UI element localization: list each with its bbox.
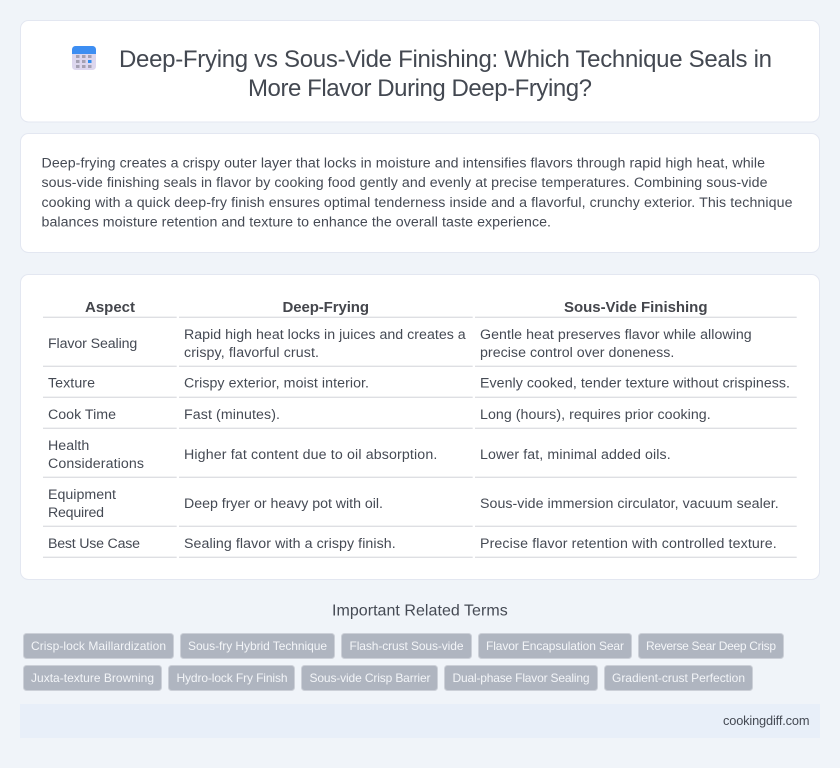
tag: sous-fry hybrid technique: Sous-fry Hybrid Technique: [188, 639, 327, 653]
table header: Sous-Vide Finishing: [564, 299, 708, 316]
text block: intro paragraph: sous-vide finishing seals in flavor by cooking food gently and evenly at precise temperatures. Combining sous-vide: [42, 175, 768, 191]
tag: gradient-crust perfection: [604, 666, 752, 690]
tag: flavor encapsulation sear: [478, 634, 632, 658]
table row: health considerations: Health: [48, 438, 89, 454]
heading: important related terms: Important Related Terms: [332, 603, 508, 620]
text block: intro paragraph: balances moisture retention and texture to enhance the overall taste experience.: [42, 214, 551, 230]
text block: intro paragraph: Deep-frying creates a crispy outer layer that locks in moisture and intensifies flavors through rapid high heat, while: [42, 156, 765, 172]
table row: flavor sealing: Flavor Sealing: [48, 336, 137, 352]
footer bar: cookingdiff.com: [723, 713, 810, 728]
tag: hydro-lock fry finish: [168, 666, 294, 690]
icon: calendar: [72, 46, 96, 70]
table row: flavor sealing: Gentle heat preserves flavor while allowing: [480, 327, 752, 343]
table row: texture: [43, 376, 797, 397]
table row: equipment required: Deep fryer or heavy pot with oil.: [184, 496, 383, 512]
panel: title card: [20, 20, 820, 122]
tag: dual-phase flavor sealing: [444, 666, 598, 690]
footer bar: [20, 704, 820, 738]
table row: health considerations: Higher fat content due to oil absorption.: [184, 447, 437, 463]
table row: best use case: Precise flavor retention with controlled texture.: [480, 536, 777, 552]
table row: health considerations: [43, 438, 797, 477]
tag: sous-vide crisp barrier: Sous-vide Crisp Barrier: [310, 671, 430, 685]
table row: cook time: [43, 407, 797, 428]
table row: best use case: Sealing flavor with a crispy finish.: [184, 536, 396, 552]
table row: texture: Crispy exterior, moist interior.: [184, 376, 369, 392]
table row: flavor sealing: precise control over doneness.: [480, 345, 674, 361]
table row: cook time: Cook Time: [48, 407, 116, 423]
table row: flavor sealing: [43, 327, 797, 366]
tag: juxta-texture browning: [24, 666, 162, 690]
tag: reverse sear deep crisp: Reverse Sear Deep Crisp: [646, 639, 776, 653]
tag: sous-fry hybrid technique: [180, 634, 334, 658]
table row: best use case: [43, 536, 797, 557]
table row: best use case: Best Use Case: [48, 536, 140, 552]
table row: flavor sealing: crispy, flavorful crust.: [184, 345, 319, 361]
tag: juxta-texture browning: Juxta-texture Browning: [31, 671, 154, 685]
tag: dual-phase flavor sealing: Dual-phase Flavor Sealing: [452, 671, 590, 685]
table row: health considerations: Considerations: [48, 456, 144, 472]
table header: Deep-Frying: [282, 299, 369, 316]
panel: comparison table: [20, 274, 820, 580]
tag: flash-crust sous-vide: [342, 634, 472, 658]
table row: equipment required: Required: [48, 505, 104, 521]
tag: flash-crust sous-vide: Flash-crust Sous-vide: [350, 639, 464, 653]
title: Deep-Frying vs Sous-Vide Finishing: Which Technique Seals in: [119, 46, 772, 73]
tag: crisp-lock maillardization: Crisp-lock Maillardization: [31, 639, 166, 653]
tag: flavor encapsulation sear: Flavor Encapsulation Sear: [486, 639, 624, 653]
table header: [43, 299, 797, 317]
table row: cook time: Long (hours), requires prior cooking.: [480, 407, 711, 423]
table row: equipment required: Sous-vide immersion circulator, vacuum sealer.: [480, 496, 779, 512]
tag: reverse sear deep crisp: [638, 634, 784, 658]
panel: related term tags: [24, 634, 784, 690]
tag: sous-vide crisp barrier: [302, 666, 438, 690]
table row: health considerations: Lower fat, minimal added oils.: [480, 447, 671, 463]
tag: crisp-lock maillardization: [24, 634, 174, 658]
tag: hydro-lock fry finish: Hydro-lock Fry Finish: [176, 671, 288, 685]
table row: flavor sealing: Rapid high heat locks in juices and creates a: [184, 327, 466, 343]
panel: introduction text: [20, 134, 820, 252]
table row: cook time: Fast (minutes).: [184, 407, 280, 423]
text block: intro paragraph: cooking with a quick deep-fry finish ensures optimal tenderness inside and a flavorful, crunchy exterior. This technique: [42, 195, 793, 211]
table row: equipment required: Equipment: [48, 487, 116, 503]
table row: texture: Texture: [48, 376, 95, 392]
title: [119, 46, 772, 102]
tag: gradient-crust perfection: Gradient-crust Perfection: [612, 671, 745, 685]
table row: equipment required: [43, 487, 797, 526]
table row: texture: Evenly cooked, tender texture without crispiness.: [480, 376, 790, 392]
title: More Flavor During Deep-Frying?: [248, 75, 592, 102]
text block: intro paragraph: [42, 156, 793, 230]
table header: Aspect: [85, 299, 135, 316]
